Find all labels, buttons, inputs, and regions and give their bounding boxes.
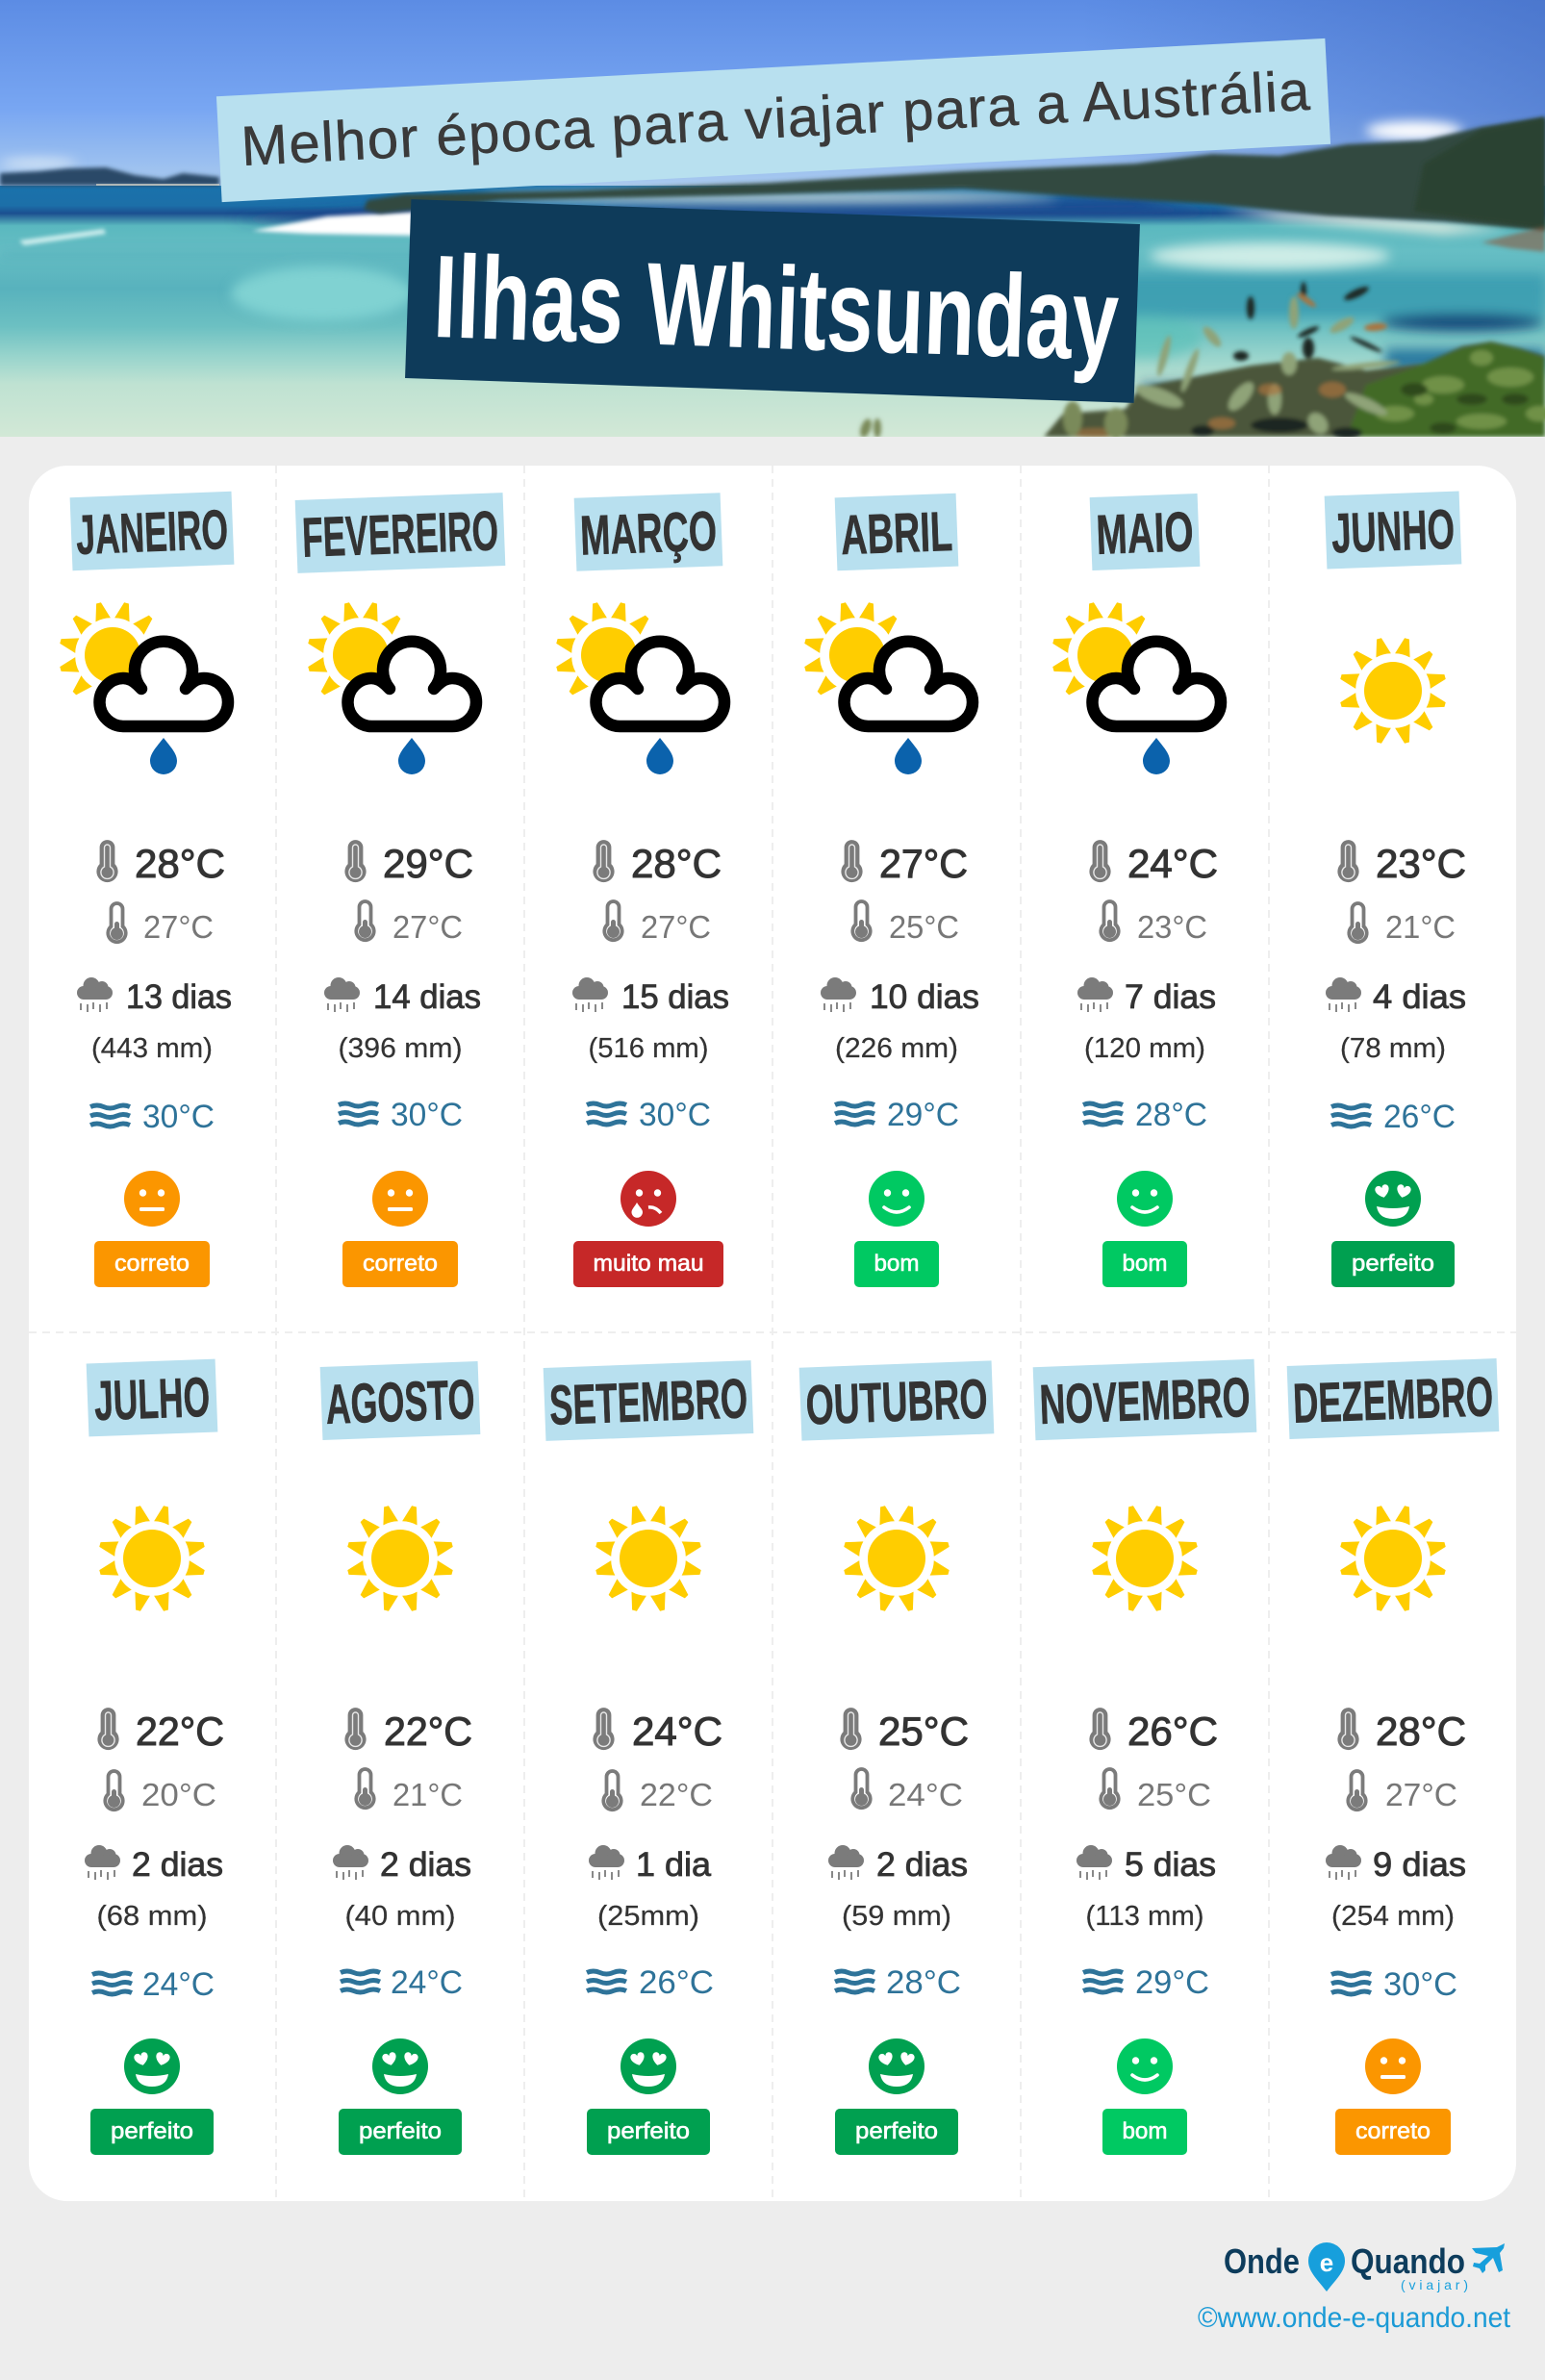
foliage xyxy=(858,282,1545,439)
sea temperature: 30°C xyxy=(391,1097,463,1133)
rating badge xyxy=(342,1241,458,1287)
month: Abril xyxy=(803,494,979,1287)
min temperature: 21°C xyxy=(393,1777,463,1812)
website credit: ©www.onde-e-quando.net xyxy=(1198,2302,1511,2334)
icon: min temperature xyxy=(1101,1769,1119,1808)
icon: rain xyxy=(333,1845,368,1880)
max temperature: 28°C xyxy=(1376,1709,1466,1754)
rainfall: (78 mm) xyxy=(1340,1033,1446,1064)
icon: rain xyxy=(1077,977,1113,1012)
heading: Novembro: NOVEMBRO xyxy=(1038,1366,1252,1436)
sea temperature: 30°C xyxy=(142,1099,215,1135)
max temperature: 25°C xyxy=(878,1709,969,1754)
icon: max temperature xyxy=(1091,1709,1109,1748)
icon: max temperature xyxy=(1091,842,1109,880)
icon: heart-eyes face xyxy=(1365,1171,1421,1227)
month: Julho xyxy=(85,1359,224,2155)
icon: rain xyxy=(77,977,113,1012)
rain days: 7 dias xyxy=(1125,978,1216,1016)
heading: Julho xyxy=(87,1359,217,1436)
icon: sun xyxy=(98,1505,206,1612)
icon: neutral face xyxy=(372,1171,428,1227)
icon: sun xyxy=(346,1505,454,1612)
rating badge xyxy=(339,2109,462,2155)
subtitle banner xyxy=(216,38,1330,202)
icon: sun xyxy=(595,1505,702,1612)
min temperature: 21°C xyxy=(1385,909,1456,945)
rating badge: muito mau xyxy=(594,1251,703,1277)
month: Janeiro xyxy=(59,492,234,1287)
heading: Setembro xyxy=(544,1360,753,1441)
icon: neutral face xyxy=(1365,2038,1421,2094)
max temperature: 23°C xyxy=(1376,841,1466,886)
month: Novembro xyxy=(1033,1359,1256,2155)
sea temperature: 30°C xyxy=(639,1097,711,1133)
heading: Agosto: AGOSTO xyxy=(324,1368,476,1436)
min temperature: 27°C xyxy=(143,909,214,945)
icon: neutral face xyxy=(124,1171,180,1227)
heading: Agosto xyxy=(320,1361,480,1440)
heading: Junho xyxy=(1325,491,1461,570)
icon: max temperature xyxy=(843,842,861,880)
rating badge: perfeito xyxy=(111,2118,193,2144)
heading: Julho: JULHO xyxy=(93,1366,211,1432)
brand logo xyxy=(1224,2241,1505,2292)
sea temperature: 26°C xyxy=(1383,1099,1456,1135)
icon: sea xyxy=(90,1105,130,1127)
rain days: 4 dias xyxy=(1373,978,1466,1016)
min temperature: 20°C xyxy=(141,1777,216,1812)
icon: heart-eyes face xyxy=(372,2038,428,2094)
month: Maio xyxy=(1051,494,1221,1287)
min temperature: 27°C xyxy=(393,909,463,945)
rating badge xyxy=(835,2109,958,2155)
rain days: 15 dias xyxy=(621,978,729,1016)
icon: sun xyxy=(1339,637,1447,745)
icon: max temperature xyxy=(346,842,365,880)
heading: Março xyxy=(574,493,722,571)
icon: rain xyxy=(1326,1845,1361,1880)
sea temperature: 30°C xyxy=(1383,1966,1457,2003)
icon: sea xyxy=(1331,1105,1371,1127)
icon: sea xyxy=(1083,1971,1123,1992)
icon: max temperature xyxy=(595,842,613,880)
icon: heart-eyes face xyxy=(124,2038,180,2094)
month: Março xyxy=(555,493,729,1287)
rating badge xyxy=(587,2109,710,2155)
icon: rain xyxy=(828,1845,864,1880)
rating badge: correto xyxy=(363,1251,438,1277)
icon: rain xyxy=(821,977,856,1012)
rating badge: bom xyxy=(1122,1251,1168,1277)
rainfall: (40 mm) xyxy=(344,1901,456,1932)
rain days: 2 dias xyxy=(132,1846,223,1884)
heading: Maio xyxy=(1090,494,1200,570)
rain days: 10 dias xyxy=(870,978,979,1016)
rainfall: (254 mm) xyxy=(1331,1901,1455,1932)
icon: min temperature xyxy=(108,903,126,942)
icon: rain xyxy=(1076,1845,1112,1880)
heading: Março: MARÇO xyxy=(579,499,718,568)
max temperature: 29°C xyxy=(383,841,473,886)
icon: sea xyxy=(835,1103,874,1125)
icon: crying face xyxy=(621,1171,676,1227)
rainfall: (443 mm) xyxy=(91,1033,213,1064)
min temperature: 22°C xyxy=(640,1777,713,1812)
icon: sun and rain cloud xyxy=(59,601,228,774)
heading: Janeiro: JANEIRO xyxy=(75,498,229,567)
rainfall: (226 mm) xyxy=(835,1033,958,1064)
min temperature: 23°C xyxy=(1137,909,1207,945)
icon: rain xyxy=(85,1845,120,1880)
rating badge: perfeito xyxy=(855,2118,938,2144)
icon: max temperature xyxy=(595,1709,613,1748)
icon: sea xyxy=(1331,1973,1371,1994)
month: Outubro xyxy=(799,1360,994,2155)
icon: smiling face xyxy=(869,1171,924,1227)
icon: sea xyxy=(587,1971,626,1992)
rating badge: bom xyxy=(874,1251,920,1277)
brand logo: (viajar) xyxy=(1401,2277,1468,2292)
max temperature: 28°C xyxy=(631,841,722,886)
title banner: Ilhas Whitsunday xyxy=(432,231,1121,385)
heading: Fevereiro xyxy=(295,493,505,573)
icon: min temperature xyxy=(356,1769,374,1808)
heading: Abril: ABRIL xyxy=(840,500,953,567)
month: Fevereiro xyxy=(295,493,505,1287)
rain days: 2 dias xyxy=(876,1846,968,1884)
max temperature: 27°C xyxy=(879,841,968,886)
rainfall: (396 mm) xyxy=(339,1033,462,1064)
brand logo: e xyxy=(1320,2248,1333,2277)
rainfall: (25mm) xyxy=(597,1901,699,1932)
icon: sun and rain cloud xyxy=(803,601,973,774)
icon: sun xyxy=(843,1505,950,1612)
rainfall: (516 mm) xyxy=(588,1033,709,1064)
title banner xyxy=(405,199,1140,403)
icon: map pin xyxy=(1308,2242,1345,2291)
rain days: 5 dias xyxy=(1125,1846,1216,1884)
max temperature: 28°C xyxy=(135,841,225,886)
icon: min temperature xyxy=(105,1771,123,1810)
heading: Junho: JUNHO xyxy=(1330,498,1456,565)
sea temperature: 24°C xyxy=(391,1964,463,2001)
rating badge xyxy=(90,2109,214,2155)
rain days: 1 dia xyxy=(636,1846,712,1884)
icon: sun and rain cloud xyxy=(555,601,724,774)
icon: sea xyxy=(92,1973,132,1994)
icon: max temperature xyxy=(99,1709,117,1748)
icon: rain xyxy=(1326,977,1361,1012)
heading: Setembro: SETEMBRO xyxy=(548,1367,748,1437)
icon: smiling face xyxy=(1117,2038,1173,2094)
rainfall: (113 mm) xyxy=(1086,1901,1203,1932)
rating badge xyxy=(573,1241,723,1287)
rating badge: bom xyxy=(1122,2118,1168,2144)
rating badge xyxy=(1331,1241,1455,1287)
heading: Fevereiro: FEVEREIRO xyxy=(301,499,499,570)
min temperature: 24°C xyxy=(888,1777,963,1812)
rating badge xyxy=(854,1241,939,1287)
icon: min temperature xyxy=(1101,901,1119,940)
icon: min temperature xyxy=(852,901,871,940)
header photo: Whitsunday beach xyxy=(0,0,1545,439)
rating badge xyxy=(1102,1241,1187,1287)
rating badge xyxy=(1102,2109,1187,2155)
min temperature: 25°C xyxy=(1137,1777,1211,1812)
max temperature: 22°C xyxy=(136,1709,224,1754)
rating badge: correto xyxy=(114,1251,190,1277)
rating badge: perfeito xyxy=(359,2118,442,2144)
icon: rain xyxy=(572,977,608,1012)
min temperature: 27°C xyxy=(1385,1777,1457,1812)
icon: min temperature xyxy=(1348,1771,1366,1810)
month: Dezembro xyxy=(1287,1358,1499,2155)
icon: sea xyxy=(1083,1103,1123,1125)
icon: rain xyxy=(589,1845,624,1880)
rainfall: (68 mm) xyxy=(96,1901,208,1932)
heading: Outubro: OUTUBRO xyxy=(804,1368,989,1436)
icon: heart-eyes face xyxy=(869,2038,924,2094)
icon: min temperature xyxy=(356,901,374,940)
icon: sea xyxy=(835,1971,874,1992)
min temperature: 25°C xyxy=(889,909,959,945)
month: Junho xyxy=(1325,491,1466,1287)
icon: min temperature xyxy=(604,901,622,940)
icon: sun and rain cloud xyxy=(1051,601,1221,774)
icon: sea xyxy=(587,1103,626,1125)
icon: min temperature xyxy=(603,1771,621,1810)
panel: monthly climate card xyxy=(29,466,1516,2201)
icon: min temperature xyxy=(852,1769,871,1808)
rainfall: (120 mm) xyxy=(1084,1033,1205,1064)
heading: Abril xyxy=(835,494,958,570)
heading: Novembro xyxy=(1033,1359,1256,1440)
sea temperature: 26°C xyxy=(639,1964,714,2001)
month: Setembro xyxy=(544,1360,753,2155)
sea temperature: 29°C xyxy=(1135,1964,1209,2001)
heading: Maio: MAIO xyxy=(1095,500,1195,567)
rating badge xyxy=(1335,2109,1451,2155)
heading: Outubro xyxy=(799,1360,994,1441)
icon: max temperature xyxy=(842,1709,860,1748)
rain days: 14 dias xyxy=(373,978,481,1016)
max temperature: 26°C xyxy=(1127,1709,1218,1754)
month: Agosto xyxy=(320,1361,480,2155)
max temperature: 24°C xyxy=(632,1709,722,1754)
rating badge: perfeito xyxy=(607,2118,690,2144)
icon: max temperature xyxy=(346,1709,365,1748)
rain days: 2 dias xyxy=(380,1846,471,1884)
icon: rain xyxy=(324,977,360,1012)
sea temperature: 28°C xyxy=(1135,1097,1207,1133)
icon: sun and rain cloud xyxy=(307,601,476,774)
sea temperature: 29°C xyxy=(887,1097,959,1133)
icon: airplane xyxy=(1472,2243,1505,2273)
icon: max temperature xyxy=(1339,1709,1357,1748)
icon: sun xyxy=(1091,1505,1199,1612)
rain days: 9 dias xyxy=(1373,1846,1466,1884)
brand logo: Onde xyxy=(1224,2241,1300,2281)
icon: sun xyxy=(1339,1505,1447,1612)
icon: smiling face xyxy=(1117,1171,1173,1227)
icon: sea xyxy=(341,1971,380,1992)
subtitle banner: Melhor época para viajar para a Austrália xyxy=(240,60,1312,178)
rain days: 13 dias xyxy=(126,978,232,1016)
sea temperature: 24°C xyxy=(142,1966,215,2003)
icon: min temperature xyxy=(1349,903,1367,942)
icon: sea xyxy=(339,1103,378,1125)
heading: Janeiro xyxy=(70,492,234,570)
min temperature: 27°C xyxy=(641,909,711,945)
max temperature: 24°C xyxy=(1127,841,1218,886)
icon: max temperature xyxy=(1339,842,1357,880)
icon: max temperature xyxy=(98,842,116,880)
brand logo: Quando xyxy=(1351,2241,1465,2281)
rating badge xyxy=(94,1241,210,1287)
rating badge: perfeito xyxy=(1352,1251,1434,1277)
rainfall: (59 mm) xyxy=(842,1901,951,1932)
max temperature: 22°C xyxy=(384,1709,472,1754)
sea temperature: 28°C xyxy=(886,1964,961,2001)
rating badge: correto xyxy=(1355,2118,1431,2144)
icon: heart-eyes face xyxy=(621,2038,676,2094)
